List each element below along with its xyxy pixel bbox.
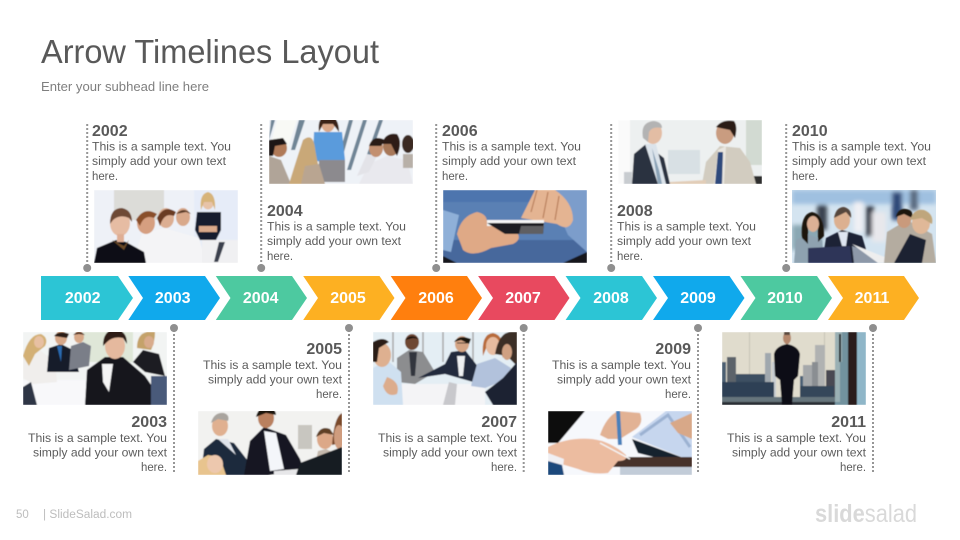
footer page number: 50: [16, 509, 29, 521]
photo: businesswoman at table: [23, 332, 167, 405]
milestone: 2005: simply add your own text: [208, 372, 343, 386]
milestone: 2010: [782, 123, 936, 272]
photo: team seated: [94, 190, 238, 263]
title: Arrow Timelines Layout: [41, 33, 379, 70]
photo: man at city window: [722, 332, 866, 405]
milestone: 2008: here.: [617, 249, 643, 263]
milestone: 2009: 2009: [655, 341, 691, 358]
milestone: 2002: This is a sample text. You: [92, 140, 231, 154]
milestone: 2009: This is a sample text. You: [552, 358, 691, 372]
milestone: 2008: [607, 120, 762, 272]
milestone: 2006: simply add your own text: [442, 154, 577, 168]
milestone: 2009: simply add your own text: [557, 372, 692, 386]
brand logo: slidesalad: [815, 500, 917, 528]
milestone: 2005: This is a sample text. You: [203, 358, 342, 372]
photo: standing presenter: [269, 120, 413, 184]
milestone: 2004: simply add your own text: [267, 234, 402, 248]
photo: hands with phone: [443, 190, 587, 263]
arrow: 2004: [216, 276, 307, 320]
milestone: 2003: simply add your own text: [33, 446, 168, 460]
subhead: Enter your subhead line here: [41, 79, 209, 94]
milestone: 2011: This is a sample text. You: [727, 431, 866, 445]
arrow: 2011: [828, 276, 919, 320]
photo: signing document: [548, 411, 692, 475]
milestone: 2006: This is a sample text. You: [442, 140, 581, 154]
milestone: 2005: 2005: [306, 341, 342, 358]
arrow: 2002: 2002: [65, 290, 101, 307]
arrow: 2007: [478, 276, 570, 320]
arrow: 2008: 2008: [593, 290, 629, 307]
arrow: 2009: 2009: [680, 290, 716, 307]
milestone: 2011: [722, 324, 877, 474]
milestone: 2003: [23, 324, 178, 474]
arrow: 2003: 2003: [155, 290, 191, 307]
arrow timeline band: [41, 276, 919, 320]
milestone: 2008: 2008: [617, 203, 653, 220]
arrow: 2010: 2010: [767, 290, 803, 307]
milestone: 2006: [432, 123, 587, 272]
milestone: 2003: here.: [141, 460, 167, 474]
milestone: 2002: here.: [92, 169, 118, 183]
milestone: 2005: [198, 324, 353, 475]
milestone: 2011: 2011: [831, 414, 866, 431]
milestone: 2010: 2010: [792, 123, 828, 140]
milestone: 2005: here.: [316, 387, 342, 401]
milestone: 2010: This is a sample text. You: [792, 140, 931, 154]
milestone: 2004: 2004: [267, 203, 303, 220]
arrow: 2011: 2011: [855, 290, 889, 307]
photo: handshake: [623, 120, 762, 184]
milestone: 2007: here.: [491, 460, 517, 474]
milestone: 2004: [257, 114, 414, 272]
arrow: 2006: [391, 276, 482, 320]
milestone: 2011: simply add your own text: [732, 446, 867, 460]
milestone: 2003: 2003: [131, 414, 167, 431]
milestone: 2004: here.: [267, 249, 293, 263]
arrow: 2007: 2007: [505, 290, 541, 307]
milestone: 2011: here.: [840, 460, 866, 474]
milestone: 2009: here.: [665, 387, 691, 401]
milestone: 2010: simply add your own text: [792, 154, 927, 168]
footer site name: | SlideSalad.com: [43, 509, 132, 521]
milestone: 2010: here.: [792, 169, 818, 183]
arrow: 2009: [653, 276, 744, 320]
arrow: 2003: [128, 276, 220, 320]
photo: team hand stack: [198, 411, 342, 475]
milestone: 2003: This is a sample text. You: [28, 431, 167, 445]
milestone: 2006: 2006: [442, 123, 478, 140]
arrow: 2010: [740, 276, 832, 320]
milestone: 2006: here.: [442, 169, 468, 183]
milestone: 2002: [83, 123, 238, 272]
milestone: 2004: This is a sample text. You: [267, 220, 406, 234]
photo: group at laptop: [792, 190, 936, 263]
milestone: 2007: simply add your own text: [383, 446, 518, 460]
milestone: 2002: simply add your own text: [92, 154, 227, 168]
photo: boardroom meeting: [373, 332, 517, 405]
milestone: 2008: This is a sample text. You: [617, 220, 756, 234]
arrow: 2006: 2006: [418, 290, 454, 307]
milestone: 2008: simply add your own text: [617, 234, 752, 248]
milestone: 2007: This is a sample text. You: [378, 431, 517, 445]
milestone: 2007: 2007: [481, 414, 517, 431]
milestone: 2009: [548, 324, 702, 475]
arrow: 2004: 2004: [243, 290, 279, 307]
arrow: 2002: [41, 276, 133, 320]
milestone: 2007: [373, 324, 528, 474]
arrow: 2005: [303, 276, 394, 320]
arrow: 2008: [566, 276, 657, 320]
arrow: 2005: 2005: [330, 290, 366, 307]
milestone: 2002: 2002: [92, 123, 128, 140]
